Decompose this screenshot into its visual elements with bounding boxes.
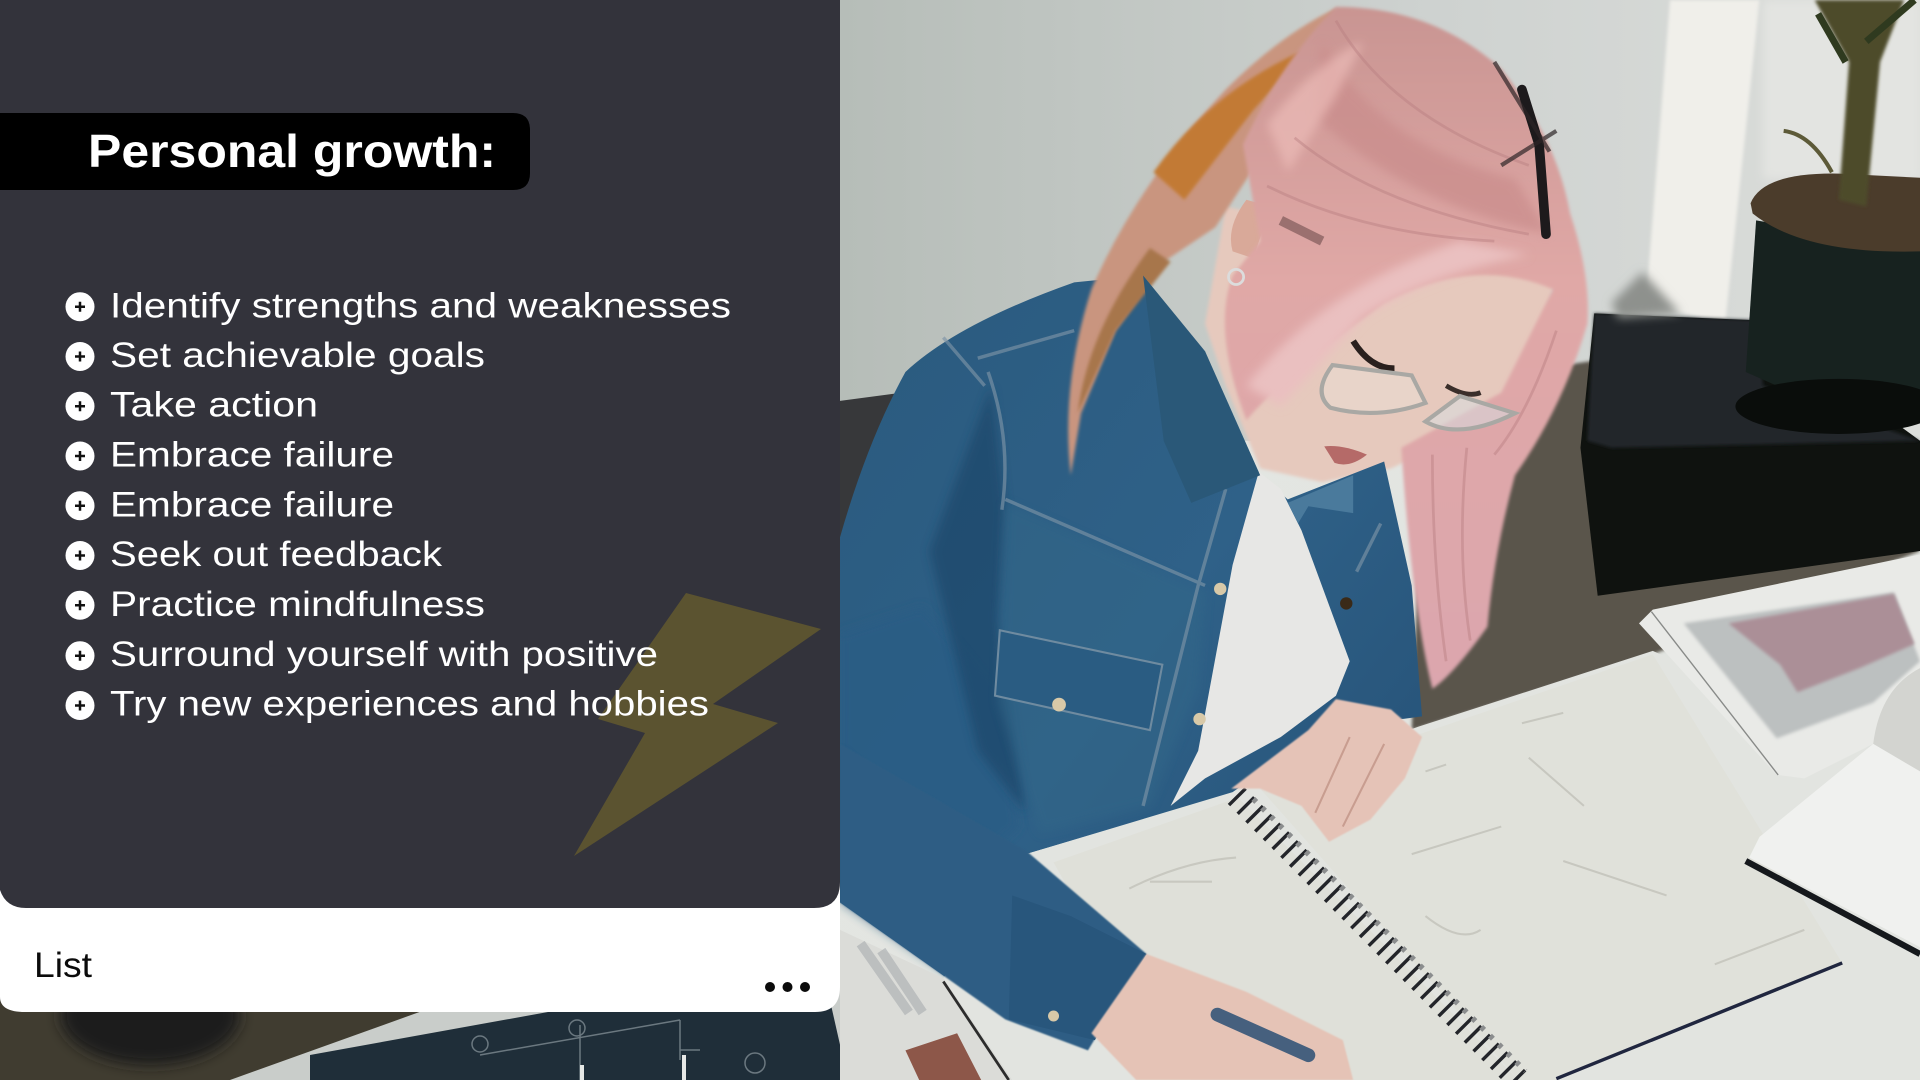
resting hand <box>1231 699 1422 842</box>
ear <box>1231 200 1270 258</box>
glasses <box>1322 365 1515 429</box>
item 5: Embrace failure <box>110 485 394 524</box>
hair parting <box>1522 90 1546 234</box>
writing hand <box>1091 954 1353 1080</box>
chest pocket <box>995 630 1162 730</box>
printed sheet <box>1639 554 1920 778</box>
title bar <box>0 113 530 190</box>
notebook bottom edge <box>1556 963 1842 1079</box>
menu dots <box>765 982 810 992</box>
white column <box>1646 0 1760 324</box>
sofa <box>840 393 902 551</box>
photo area: main scene <box>840 0 1920 1080</box>
plant pot <box>1735 0 1920 434</box>
eyes <box>1353 341 1394 369</box>
item 3: Take action <box>110 386 318 424</box>
title text: Personal growth: <box>88 125 496 177</box>
pen <box>1217 1015 1308 1055</box>
item 6: Seek out feedback <box>110 535 443 574</box>
white shirt <box>1171 472 1350 806</box>
lips <box>1324 446 1367 464</box>
left papers <box>840 930 1012 1080</box>
pink hair <box>1225 7 1588 689</box>
photo area: bottom-left desk under the panel <box>0 965 860 1080</box>
open book <box>1873 668 1920 771</box>
ponytail <box>1068 8 1350 475</box>
bullet list <box>66 286 731 724</box>
floor <box>1412 358 1920 730</box>
footer label: List <box>34 946 92 985</box>
collar <box>1143 276 1260 503</box>
sleeve and cuff <box>840 744 1147 1050</box>
seams <box>943 331 1381 806</box>
dark content panel <box>0 0 840 908</box>
dark cube <box>1580 313 1920 596</box>
item 8: Surround yourself with positive <box>110 635 658 674</box>
item 4: Embrace failure <box>110 436 394 475</box>
item 1: Identify strengths and weaknesses <box>110 286 731 326</box>
white footer card <box>0 880 840 1012</box>
decorative lightning bolt <box>574 593 821 856</box>
notebook pages <box>1054 798 1518 1080</box>
jacket shadows <box>840 606 1019 895</box>
desk front <box>943 651 1920 1080</box>
denim jacket <box>840 276 1422 1047</box>
earring <box>1228 269 1244 284</box>
cables <box>1611 272 1680 318</box>
item 9: Try new experiences and hobbies <box>110 685 709 724</box>
item 7: Practice mindfulness <box>110 585 485 624</box>
wall <box>840 0 1920 441</box>
buttons <box>1052 583 1352 725</box>
item 2: Set achievable goals <box>110 336 485 375</box>
spiral binding <box>1236 796 1518 1080</box>
face and neck <box>1205 207 1556 482</box>
sketch marks <box>1129 713 1804 964</box>
